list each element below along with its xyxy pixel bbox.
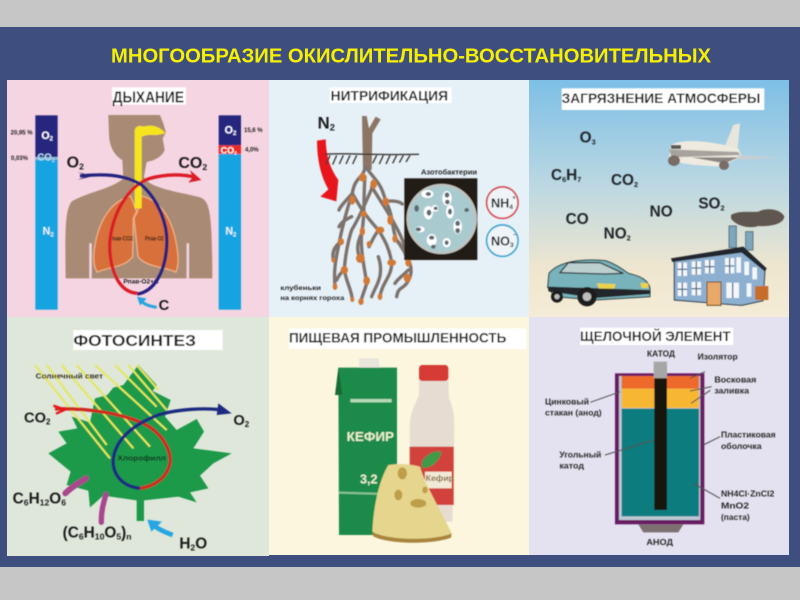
ion: nitrate	[487, 225, 518, 256]
human torso	[65, 115, 212, 278]
labels	[545, 350, 776, 547]
label CO2: 2	[46, 417, 51, 426]
caption: azotobacter: Азотобактерии	[421, 168, 477, 176]
label starch: O	[104, 525, 116, 542]
pollutant formulas: SO	[698, 196, 720, 213]
soil	[325, 154, 419, 165]
kefir carton: КЕФИР	[347, 429, 394, 444]
pollutant formulas: NO	[650, 204, 673, 221]
pollutant formulas: CO	[611, 172, 634, 189]
label glucose: 12	[40, 498, 49, 508]
ion: nitrate: 3	[510, 242, 514, 249]
smoke cloud	[731, 209, 784, 227]
labels: КАТОД	[647, 350, 675, 359]
factory	[671, 226, 768, 305]
label N2: 2	[330, 123, 335, 133]
pollutant formulas: NO	[604, 225, 627, 242]
label water: O	[195, 535, 207, 552]
right air composition bar: 15,6 %	[244, 128, 263, 134]
panel: alkaline cell	[529, 317, 789, 555]
pollutant formulas: 2	[720, 204, 725, 213]
label starch: (C	[63, 525, 79, 542]
pollutant formulas: CO	[566, 211, 589, 228]
label O2: O	[67, 154, 79, 171]
left air composition bar: CO	[37, 153, 52, 164]
labels: MnO2	[721, 501, 750, 510]
airplane	[668, 123, 781, 170]
right air composition bar: N	[225, 226, 233, 238]
left air composition bar: 2	[50, 137, 54, 143]
labels: Изолятор	[698, 353, 738, 362]
labels: Угольный	[559, 450, 601, 459]
ion: ammonium	[487, 187, 518, 218]
lungs	[94, 196, 178, 285]
labels: заливка	[714, 386, 750, 395]
labels: NH4Cl·ZnCl2	[721, 490, 775, 499]
label water: H	[179, 535, 190, 552]
labels: Восковая	[714, 376, 757, 385]
arrow: glucose	[65, 478, 86, 493]
leader lines	[590, 372, 720, 498]
ion: ammonium: NH	[491, 196, 509, 210]
caption: sunlight: Солнечный свет	[36, 371, 103, 380]
arrow: carbon input	[137, 297, 157, 307]
heading: alkaline cell: ЩЕЛОЧНОЙ ЭЛЕМЕНТ	[580, 327, 731, 344]
label CO2: CO	[178, 155, 202, 172]
pollutant formulas: C	[551, 167, 562, 184]
labels: катод	[559, 462, 584, 471]
maple leaf	[48, 365, 232, 521]
right air composition bar: 4,0%	[245, 148, 259, 154]
arrow: blue oxygen	[80, 175, 167, 294]
label N2: N	[318, 114, 330, 133]
ion: nitrate: −	[513, 233, 517, 239]
labels: Пластиковая	[721, 431, 776, 440]
heading: air pollution: ЗАГРЯЗНЕНИЕ АТМОСФЕРЫ	[562, 90, 760, 106]
right air composition bar: 2	[233, 131, 237, 137]
heading: respiration: ДЫХАНИЕ	[113, 89, 184, 106]
right air composition bar: 2	[233, 232, 237, 238]
left air composition bar: 2	[50, 232, 54, 238]
label C: C	[159, 298, 170, 314]
label starch: 6	[79, 532, 84, 542]
arrow: red carbon dioxide	[53, 406, 170, 488]
panel: nitrification	[269, 80, 529, 317]
arrow: blue oxygen	[113, 403, 232, 488]
right air composition bar: O	[225, 124, 233, 136]
pollutant formulas: H	[566, 167, 577, 184]
root nodules	[331, 173, 411, 305]
cheese	[372, 464, 452, 543]
left air composition bar: 0,03%	[11, 156, 29, 162]
kefir carton	[335, 358, 397, 535]
labels: Цинковый	[545, 397, 589, 406]
right air composition bar	[219, 115, 263, 310]
battery	[615, 362, 704, 532]
panel: air pollution	[529, 80, 789, 317]
arrow: nitrogen down	[317, 139, 338, 201]
caption: chlorophyll: Хлорофилл	[117, 453, 166, 462]
left air composition bar: 20,95 %	[11, 130, 33, 136]
label glucose: C	[13, 491, 24, 508]
bottle	[410, 365, 454, 522]
label O2: O	[233, 413, 245, 429]
label O2: 2	[245, 420, 250, 429]
airway	[135, 126, 166, 208]
caption: nodules	[280, 284, 345, 302]
right air composition bar: 2	[234, 150, 237, 156]
label water: 2	[190, 542, 195, 552]
right air composition bar: CO	[221, 145, 234, 155]
lungs: Pпав-CO2	[109, 237, 134, 243]
left air composition bar: O	[41, 130, 50, 142]
label starch: n	[126, 532, 132, 542]
label starch: )	[121, 525, 126, 542]
microscope view	[404, 178, 477, 260]
heading: food industry: ПИЩЕВАЯ ПРОМЫШЛЕННОСТЬ	[289, 329, 506, 345]
label glucose: O	[49, 491, 61, 508]
panel: respiration	[7, 80, 269, 317]
heading: photosynthesis: ФОТОСИНТЕЗ	[73, 333, 196, 350]
label starch: H	[84, 525, 95, 542]
lungs: Pпав-O2	[145, 237, 164, 243]
label O2: 2	[79, 161, 84, 171]
heading: photosynthesis	[73, 330, 223, 350]
left air composition bar	[11, 115, 58, 310]
ion: ammonium: 4	[509, 204, 513, 211]
caption: nodules: на корнях гороха	[280, 295, 345, 302]
label glucose: 6	[61, 498, 66, 508]
labels: стакан (анод)	[545, 409, 602, 418]
ion: nitrate: NO	[491, 234, 510, 248]
pollutant formulas	[551, 130, 725, 242]
pollutant formulas: 3	[592, 138, 596, 147]
left air composition bar: 2	[52, 158, 55, 164]
label starch: 5	[116, 532, 121, 542]
heading: nitrification: НИТРИФИКАЦИЯ	[331, 87, 448, 103]
pollutant formulas: 2	[627, 233, 631, 242]
car	[548, 260, 650, 306]
label CO2: CO	[24, 410, 46, 426]
kefir carton: 3,2	[360, 472, 378, 486]
label starch: 10	[95, 532, 105, 542]
pollutant formulas: O	[580, 130, 592, 147]
labels: АНОД	[646, 538, 673, 547]
label glucose: 6	[24, 498, 29, 508]
label glucose: H	[29, 491, 40, 508]
ion: ammonium: +	[512, 195, 516, 201]
pollutant formulas: 6	[562, 175, 566, 184]
pollutant formulas: 7	[577, 175, 581, 184]
bottle: Кефир	[426, 473, 454, 483]
title: МНОГООБРАЗИЕ ОКИСЛИТЕЛЬНО-ВОССТАНОВИТЕЛЬНЫХ	[111, 46, 712, 68]
arrow: red carbon dioxide	[110, 175, 195, 293]
labels: (паста)	[721, 513, 750, 522]
left air composition bar: N	[43, 226, 50, 238]
pollutant formulas: 2	[634, 180, 638, 189]
plant stem	[362, 116, 381, 170]
caption: nodules: клубеньки	[280, 284, 321, 292]
panel: food industry	[269, 317, 529, 555]
panel: photosynthesis	[7, 317, 269, 556]
arrow: starch	[101, 494, 106, 522]
arrow: water	[147, 520, 173, 535]
label CO2: 2	[202, 162, 207, 172]
sun rays	[35, 365, 167, 458]
lungs: Pпав-O2+C	[123, 279, 159, 285]
roots	[333, 168, 411, 302]
labels: оболочка	[721, 442, 762, 451]
